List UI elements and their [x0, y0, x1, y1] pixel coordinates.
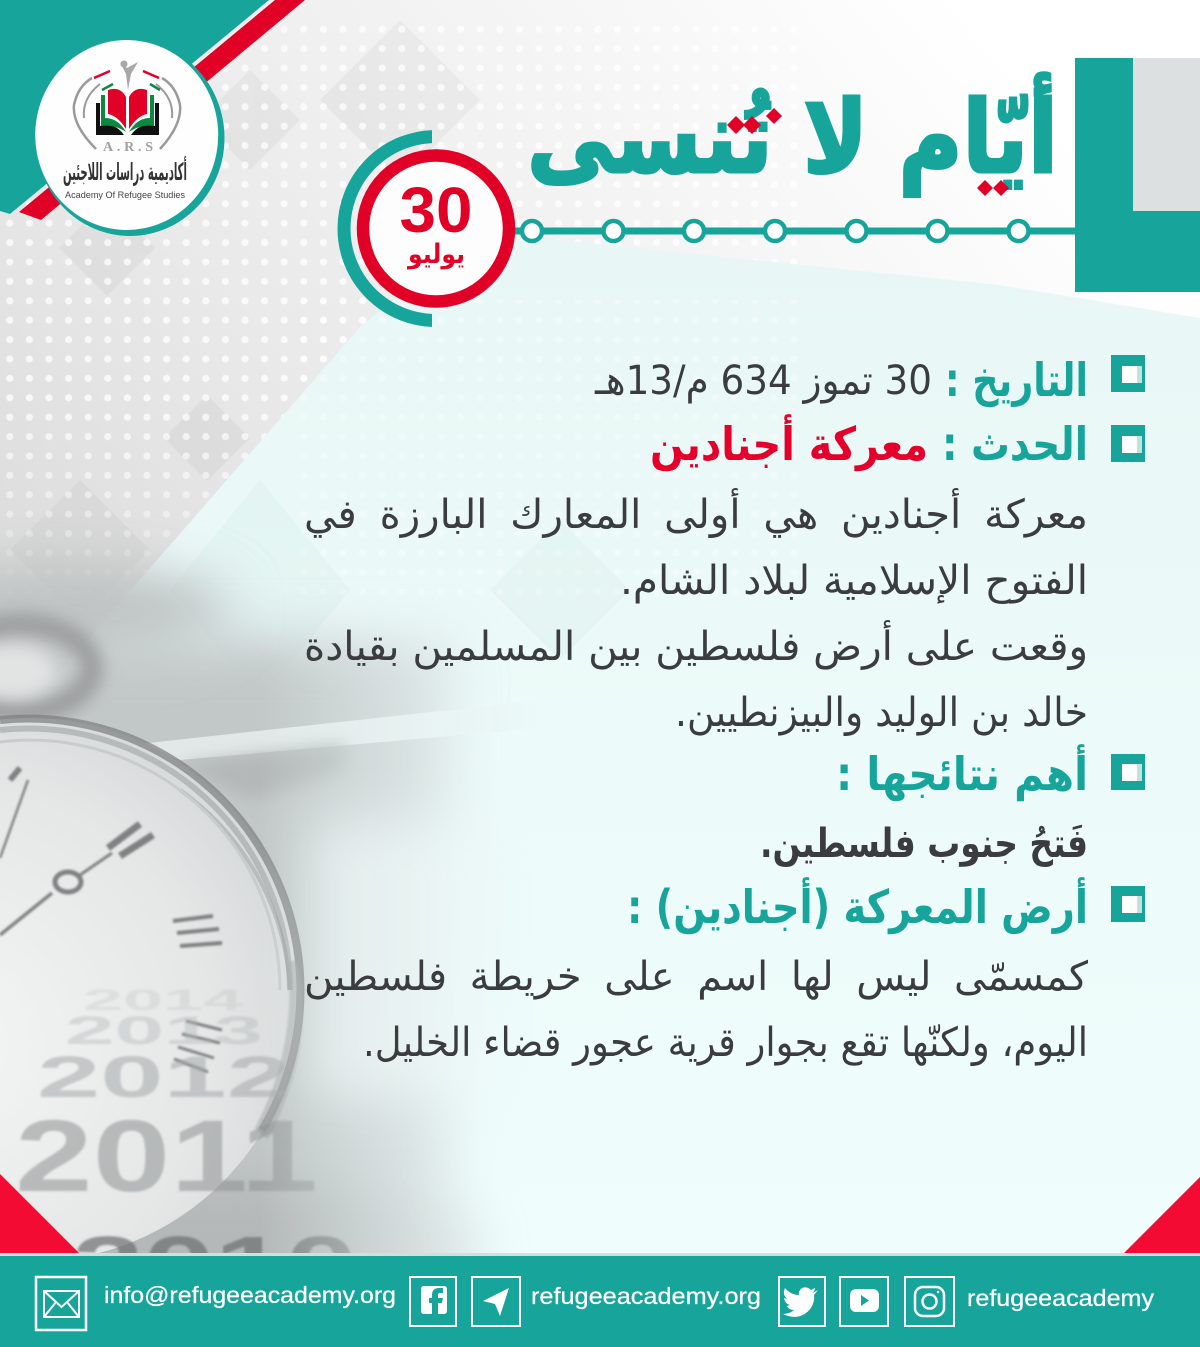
icon: facebook — [410, 1277, 456, 1326]
logo badge: أكاديمية دراسات اللاجئين — [63, 156, 187, 186]
event description: معركة أجنادين هي أولى المعارك البارزة في — [304, 488, 1088, 538]
bullet: date — [1111, 355, 1145, 392]
date label: التاريخ : — [945, 353, 1088, 407]
event description: خالد بن الوليد والبيزنطيين. — [675, 690, 1088, 736]
event description: الفتوح الإسلامية لبلاد الشام. — [620, 558, 1088, 604]
icon: youtube — [840, 1277, 888, 1326]
icon: telegram — [472, 1277, 520, 1326]
logo initials: A.R.S — [103, 140, 153, 155]
date value: 30 تموز 634 م/13هـ — [594, 358, 932, 404]
icon: instagram — [905, 1277, 954, 1326]
date badge — [344, 136, 528, 320]
top-left teal and red corner — [0, 0, 305, 220]
logo emblem — [74, 60, 180, 149]
results heading: أهم نتائجها : — [836, 744, 1088, 801]
footer email: info@refugeeacademy.org — [104, 1282, 396, 1308]
event label: الحدث : — [942, 417, 1088, 471]
clock hands and numerals — [0, 768, 222, 1072]
clock photo — [0, 548, 484, 1253]
pale cyan panel — [0, 232, 1200, 1256]
footer bar — [0, 1253, 1200, 1347]
top-right block — [1075, 58, 1200, 292]
footer website: refugeeacademy.org — [531, 1283, 761, 1309]
icon: mail — [36, 1277, 86, 1330]
bullet: event — [1111, 425, 1145, 462]
title red diamond dots — [727, 108, 1009, 196]
date month: يوليو — [406, 239, 465, 270]
footer handle: refugeeacademy — [967, 1285, 1154, 1311]
event description: وقعت على أرض فلسطين بين المسلمين بقيادة — [304, 620, 1088, 670]
battlefield description: اليوم، ولكنّها تقع بجوار قرية عجور قضاء الخليل. — [363, 1020, 1088, 1066]
cyan panel diamonds — [170, 480, 630, 700]
halftone dots — [6, 26, 660, 554]
red corner triangle right — [1123, 1177, 1200, 1254]
year numerals: 2011 — [15, 1099, 318, 1213]
bullet: battlefield — [1111, 886, 1145, 922]
battlefield heading: أرض المعركة (أجنادين) : — [627, 877, 1088, 934]
year numerals — [18, 990, 351, 1253]
logo english name: Academy Of Refugee Studies — [65, 190, 185, 201]
cyan panel dots — [300, 300, 800, 600]
timeline — [510, 221, 1076, 241]
year numerals: 2012 — [37, 1045, 290, 1110]
event name: معركة أجنادين — [650, 414, 928, 471]
year numerals: 2014 — [83, 984, 244, 1017]
year numerals: 2013 — [65, 1009, 263, 1053]
bullet: results — [1111, 754, 1145, 790]
red corner triangle left — [0, 1174, 80, 1254]
battlefield description — [304, 954, 1089, 1066]
results text: فَتحُ جنوب فلسطين. — [760, 821, 1088, 867]
icon: twitter — [779, 1277, 825, 1326]
date number: 30 — [400, 174, 472, 246]
background diamonds — [10, 20, 480, 620]
logo badge — [35, 40, 224, 236]
title: أيّام لا تُنسى — [527, 72, 1058, 196]
battlefield description: كمسمّى ليس لها اسم على خريطة فلسطين — [304, 954, 1089, 1000]
event description — [304, 488, 1088, 736]
year numerals: 2010 — [72, 1220, 357, 1309]
